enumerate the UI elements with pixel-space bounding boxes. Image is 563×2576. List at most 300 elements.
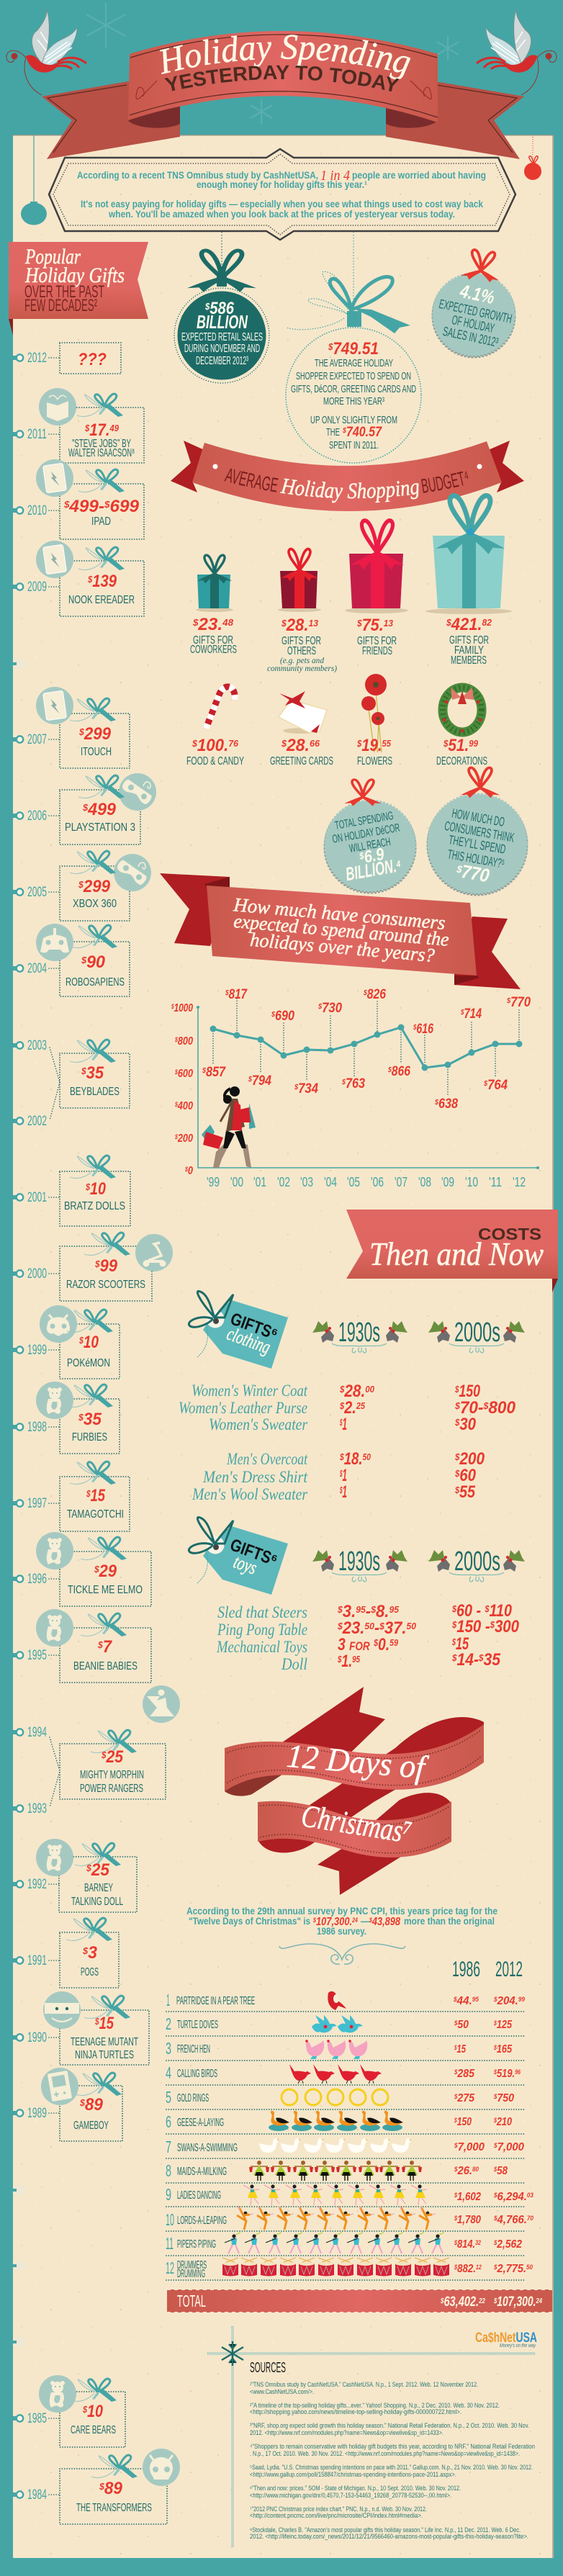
data labels: 734 <box>298 1081 318 1096</box>
data labels: $ <box>363 989 367 997</box>
budget labels row one: 28. <box>286 616 308 635</box>
timeline entry: 1985: CARE BEARS <box>71 2424 116 2436</box>
toys price table: $ <box>337 1654 342 1665</box>
ornament: 749.51 average spend: SPENT IN 2011. <box>329 439 379 451</box>
table header years: 2012 <box>495 1958 523 1981</box>
ornament: 749.51 average spend: 749.51 <box>333 339 379 359</box>
toys price table: $ <box>451 1603 457 1614</box>
heading ribbon: popular holiday gifts <box>9 242 148 335</box>
prices 1986: $ <box>453 1996 457 2003</box>
total bar: $ <box>493 2297 497 2305</box>
timeline entry: 2003 and 2002: BEYBLADES <box>70 1086 120 1098</box>
budget labels row two: $ <box>281 738 287 749</box>
prices 2012: 4,766. <box>497 2214 527 2226</box>
prices 1986: 26. <box>457 2165 472 2177</box>
title banner <box>42 31 524 159</box>
timeline entry: 1999 <box>13 1305 120 1379</box>
sources list: <http://shopping.yahoo.com/news/timeline-top-selling-holiday-gifts-000000722.html>. <box>250 2408 461 2415</box>
ornament: 749.51 average spend: GIFTS, DéCOR, GREETING CARDS AND <box>291 383 416 395</box>
ribbon: costs then and now: COSTS <box>478 1225 541 1243</box>
banner main arc <box>128 31 438 122</box>
timeline entry: 1990: 1990 <box>27 2030 47 2045</box>
toys price table: $ <box>379 1621 385 1631</box>
paragraph: twelve days survey: $ <box>369 1917 372 1924</box>
gift: others <box>278 549 321 612</box>
prices 1986: 285 <box>456 2068 475 2080</box>
timeline entry: 2007: $ <box>78 726 84 737</box>
total bar: 24 <box>536 2297 542 2305</box>
timeline entry: 2003 and 2002 <box>13 1038 130 1129</box>
timeline entry: 2010 <box>13 459 144 539</box>
budget labels row one: $ <box>281 618 287 629</box>
data labels: $ <box>248 1076 252 1084</box>
sources list: <http://www.gallup.com/poll/158847/christmas-spending-intentions-pace-2011.aspx>. <box>250 2471 456 2478</box>
timeline entry: 2000: 2000 <box>27 1266 47 1282</box>
paragraph: twelve days survey <box>186 1905 497 1937</box>
x axis labels <box>207 1175 526 1189</box>
total bar <box>167 2289 552 2312</box>
prices 2012: 2,775. <box>497 2263 526 2275</box>
timeline entry: 1990: NINJA TURTLES <box>75 2049 134 2061</box>
icon: tablet <box>36 541 73 578</box>
sources list: ²"A timeline of the top-selling holiday gifts...ever." Yahoo! Shopping. N.p., 2 Dec. 2010. Web. 30 Nov. 2012. <box>250 2402 500 2409</box>
sources list: <http://www.michigan.gov/dnr/0,4570,7-153-54463_19268_20778-52530--,00.html>. <box>250 2492 451 2499</box>
prices 1986: 882. <box>457 2263 476 2275</box>
budget labels row one: GIFTS FOR <box>357 635 397 647</box>
budget labels row one: FAMILY <box>454 644 484 657</box>
budget labels row one: 13 <box>384 618 394 629</box>
prices 2012: 7,000 <box>497 2141 524 2153</box>
text: 10 <box>166 2210 174 2229</box>
timeline entry: 1984 <box>13 2449 180 2524</box>
heading ribbon: popular holiday gifts: Popular <box>24 245 81 269</box>
icon: teddy bear <box>39 2375 76 2413</box>
prices 2012: 50 <box>526 2264 533 2271</box>
ornament: 586 billion: DURING NOVEMBER AND <box>184 343 260 355</box>
timeline entry: 1996: 1996 <box>27 1572 47 1587</box>
heading ribbon: popular holiday gifts: FEW DECADES² <box>24 296 97 315</box>
clothing price table: Men's Wool Sweater <box>192 1485 308 1503</box>
budget labels row one: 48 <box>222 617 234 628</box>
prices 2012: $ <box>493 2142 497 2149</box>
timeline entry: 2007: ITOUCH <box>81 746 112 758</box>
text: 12 <box>166 2258 174 2277</box>
toys price table: $ <box>337 1621 343 1631</box>
icon row: ladies <box>243 2184 427 2205</box>
timeline entry: 2010: $ <box>63 499 70 510</box>
intro paragraph 1: people are worried about having <box>352 169 486 181</box>
timeline entry: 2011: $ <box>84 423 90 433</box>
ribbon: how much have consumers: How much have consumers <box>232 893 446 934</box>
row numbers: 9 <box>166 2185 171 2204</box>
column headers toys: 1930s <box>338 1546 380 1577</box>
sources divider <box>207 2326 535 2547</box>
budget labels row one: OTHERS <box>287 645 316 657</box>
row labels: DRUMMING <box>177 2268 205 2280</box>
row labels: MAIDS-A-MILKING <box>177 2166 227 2178</box>
ribbon: average holiday shopping budget <box>171 441 524 511</box>
timeline entry: 1992: BARNEY <box>84 1882 113 1894</box>
clothing price table: 00 <box>365 1384 375 1395</box>
timeline entry: 2004 <box>13 924 130 996</box>
text: PARTRIDGE IN A PEAR TREE <box>176 1995 255 2007</box>
data labels: $ <box>387 1066 392 1074</box>
timeline entry: 1996: $ <box>94 1564 99 1575</box>
timeline entry: 1985: 1985 <box>27 2411 47 2426</box>
data labels: 690 <box>275 1009 294 1024</box>
timeline entry: 2007 <box>13 687 130 768</box>
y axis labels: 0 <box>188 1165 193 1177</box>
prices 1986: 32 <box>475 2239 481 2246</box>
timeline entry: 1995 <box>13 1609 151 1683</box>
timeline entry: 2010: 699 <box>109 497 140 516</box>
budget labels row two: 100. <box>197 736 228 755</box>
icon: robot skull <box>143 2449 180 2486</box>
timeline entry: 2007: 2007 <box>27 732 47 747</box>
row numbers: 3 <box>166 2039 171 2058</box>
prices 1986 <box>453 1995 485 2275</box>
clothing price table: $ <box>454 1417 460 1428</box>
budget labels row two: DECORATIONS <box>436 755 487 767</box>
icon: game controller <box>119 773 156 811</box>
budget labels row one: (e.g. pets and <box>280 655 325 665</box>
total bar: 63,402. <box>443 2294 479 2310</box>
ornament: holiday decor spending: $ <box>358 850 365 862</box>
icon row: swans <box>259 2138 412 2153</box>
y axis labels: 1000 <box>174 1002 193 1014</box>
timeline entry: 1997: 15 <box>91 1486 105 1505</box>
prices 2012: $ <box>493 2215 497 2222</box>
clothing price table: Women's Winter Coat <box>192 1382 307 1400</box>
budget labels row two: 76 <box>228 738 239 749</box>
x axis labels: '04 <box>324 1175 337 1189</box>
timeline entry: 1990: TEENAGE MUTANT <box>71 2036 138 2048</box>
timeline entry: 2003 and 2002: 2003 <box>27 1038 47 1053</box>
data labels: 763 <box>346 1076 365 1091</box>
icon: alien <box>40 1305 77 1343</box>
dotted leaders <box>213 999 519 1094</box>
toys price table: 15 <box>456 1634 469 1654</box>
icon: gameboy <box>41 2068 78 2105</box>
data labels: 794 <box>252 1073 271 1089</box>
toys price table: 95 <box>352 1654 360 1665</box>
timeline entry: 1989: $ <box>79 2097 86 2108</box>
ornament: 586 billion: EXPECTED RETAIL SALES <box>181 331 263 343</box>
logo: cashnetusa: Ca$hNetUSA <box>475 2330 537 2346</box>
timeline entry: 1997: TAMAGOTCHI <box>67 1508 124 1521</box>
prices 2012: $ <box>493 2166 497 2173</box>
gift: friends <box>345 521 408 613</box>
ornament: 4.1 percent growth: OF HOLIDAY <box>451 312 496 335</box>
toys price table: - <box>374 1618 379 1638</box>
banner: 12 days of <box>225 1724 484 1791</box>
timeline entry: 2010: IPAD <box>91 515 111 528</box>
prices 2012: 99 <box>518 1996 525 2003</box>
toys price table: 14- <box>456 1650 479 1670</box>
budget labels row two: 55 <box>382 738 392 749</box>
row divider lines <box>166 2012 525 2280</box>
ornament: 586 billion <box>174 232 269 383</box>
prices 2012: 210 <box>496 2116 512 2128</box>
snowflake decorations <box>86 3 459 124</box>
data labels: 770 <box>510 995 531 1010</box>
x axis labels: '00 <box>230 1175 243 1189</box>
timeline entry: 1998: 35 <box>84 1410 102 1429</box>
toys price table: Sled that Steers <box>217 1603 307 1621</box>
timeline entry: 1996 <box>13 1532 151 1606</box>
timeline entry: 1992: TALKING DOLL <box>71 1896 123 1908</box>
heading ribbon: popular holiday gifts: OVER THE PAST <box>24 282 104 302</box>
intro paragraph 2: when. You'll be amazed when you look back at the prices of yesteryear versus today. <box>108 208 455 220</box>
timeline entry: 2007: 299 <box>84 724 112 744</box>
intro paragraph 2: It's not easy paying for holiday gifts — especially when you see what things used to cost way back <box>81 198 483 210</box>
clothing price table: $ <box>454 1384 459 1395</box>
row labels: SWANS-A-SWIMMING <box>177 2142 238 2154</box>
sources list: ⁶"Then and now: prices." SOM - State of Michigan. N.p., 10 Sept. 2010. Web. 30 Nov. 2012. <box>250 2485 461 2492</box>
budget labels row one: 421. <box>451 615 482 634</box>
clothing price table: $ <box>339 1384 345 1395</box>
ornament: holiday decor spending: WILL REACH <box>348 836 392 855</box>
ribbon: average holiday shopping budget: AVERAGE <box>224 468 279 492</box>
timeline markers: 1988 to 1986 <box>13 2186 25 2346</box>
tag: gifts clothing <box>189 1291 288 1369</box>
timeline entry: 1994 and 1993: 1994 <box>27 1725 47 1740</box>
prices 2012: 58 <box>497 2165 508 2177</box>
icon row: turtle doves <box>312 2015 363 2032</box>
row labels: CALLING BIRDS <box>177 2068 217 2080</box>
ornament: 749.51 average spend <box>286 232 421 463</box>
ornament: 4.1 percent growth: 4.1% <box>458 280 497 308</box>
budget labels row one: 82 <box>482 617 492 628</box>
budget labels row two: 99 <box>469 738 479 749</box>
timeline entry: 2000: RAZOR SCOOTERS <box>66 1279 145 1291</box>
timeline entry: 1984: 89 <box>104 2479 123 2498</box>
y axis labels: 800 <box>178 1035 193 1048</box>
timeline entry: 2011: 49 <box>109 423 120 433</box>
x axis labels: '99 <box>207 1175 220 1189</box>
clothing price table: $ <box>340 1468 343 1479</box>
toys price table <box>216 1601 520 1673</box>
row labels: PIPERS PIPING <box>177 2238 216 2251</box>
bird right <box>477 9 557 95</box>
row labels: GEESE-A-LAYING <box>177 2117 224 2129</box>
tag: gifts toys <box>189 1517 288 1595</box>
timeline entry: 2005: 299 <box>83 877 111 896</box>
timeline entry: 1991: 1991 <box>27 1953 47 1968</box>
timeline entry: 1995: BEANIE BABIES <box>73 1660 138 1672</box>
timeline entry: 1999: 1999 <box>27 1343 47 1358</box>
ornament: 749.51 average spend: MORE THIS YEAR³ <box>323 395 384 407</box>
ribbon: average holiday shopping budget: Holiday Shopping <box>280 478 419 503</box>
ornament: 749.51 average spend: SHOPPER EXPECTED TO SPEND ON <box>296 370 411 382</box>
total bar: $ <box>440 2297 444 2305</box>
timeline entry: 2009: 139 <box>92 572 117 591</box>
data labels: 857 <box>206 1065 226 1080</box>
prices 2012: 519. <box>497 2068 515 2080</box>
prices 1986: 44. <box>456 1995 472 2007</box>
clothing price table: Women's Sweater <box>209 1415 308 1433</box>
toys price table: 3 FOR <box>338 1635 375 1654</box>
banner folds <box>128 101 180 128</box>
icon: teddy bear <box>36 1609 73 1647</box>
timeline entry: 2001: 2001 <box>27 1190 47 1205</box>
total bar: TOTAL <box>177 2292 206 2310</box>
timeline entry: 1984: 1984 <box>27 2487 47 2503</box>
timeline entry: 2004: 2004 <box>27 961 47 976</box>
paragraph: twelve days survey: more than the original <box>404 1915 495 1927</box>
toys price table: 95 <box>389 1604 400 1615</box>
timeline entry: 1990: $ <box>94 2016 99 2027</box>
timeline entry: 1994 and 1993: $ <box>101 1749 107 1760</box>
hanging ornament: red <box>524 137 541 180</box>
clothing price table: $ <box>340 1485 343 1495</box>
icon: scooter <box>135 1234 173 1271</box>
timeline entry: 1989: GAMEBOY <box>73 2120 109 2132</box>
timeline entry: 1995: 7 <box>103 1637 113 1657</box>
column headers clothing: 2000s <box>454 1318 500 1348</box>
timeline entry: 1994 and 1993: POWER RANGERS <box>80 1783 143 1795</box>
prices 1986: $ <box>454 2192 457 2199</box>
timeline entry: 2006: PLAYSTATION 3 <box>65 821 135 834</box>
clothing price table: $ <box>454 1468 460 1479</box>
row numbers <box>166 1991 174 2277</box>
toys price table: Mechanical Toys <box>216 1638 307 1656</box>
clothing price table: 28. <box>343 1382 365 1401</box>
prices 1986: $ <box>454 2117 457 2124</box>
timeline entry: 1994 and 1993: 1993 <box>27 1801 47 1816</box>
row labels <box>176 1995 255 2280</box>
sources list: ¹"TNS Omnibus study by CashNetUSA." CashNetUSA. N.p., 1 Sept. 2012. Web. 12 November 2012. <box>250 2381 478 2388</box>
prices 1986: $ <box>454 2215 457 2222</box>
row labels: LADIES DANCING <box>177 2189 221 2202</box>
tag: gifts toys: toys <box>231 1551 260 1579</box>
gift: family members <box>425 495 512 614</box>
y axis labels: 600 <box>178 1068 193 1080</box>
row numbers: 4 <box>166 2063 171 2082</box>
timeline entry: 1989: 89 <box>85 2095 104 2115</box>
icon: poppies <box>361 674 387 752</box>
sources list: <www.CashNetUSA.com/>. <box>250 2388 314 2395</box>
budget labels row one: COWORKERS <box>190 644 237 656</box>
row labels: DRUMMERS <box>177 2259 207 2271</box>
prices 2012: $ <box>493 2019 497 2027</box>
data labels: $ <box>317 1003 322 1011</box>
ornament: consumers think: HOW MUCH DO <box>451 806 506 829</box>
ornament: 4.1 percent growth <box>433 248 518 357</box>
prices 1986: $ <box>454 2019 457 2027</box>
toys price table: 50 <box>407 1621 417 1631</box>
budget labels row one: 13 <box>308 618 319 629</box>
clothing price table: $ <box>483 1400 489 1411</box>
ribbon: costs then and now <box>346 1210 558 1292</box>
budget labels row two: $ <box>192 738 197 749</box>
budget labels row one: GIFTS FOR <box>193 634 233 647</box>
timeline entry: 2011 <box>13 388 144 463</box>
x axis labels: '02 <box>277 1175 290 1189</box>
prices 1986: 95 <box>472 1996 479 2003</box>
budget labels row two: FOOD & CANDY <box>186 755 244 767</box>
timeline entry: 1991: $ <box>82 1945 89 1956</box>
data labels: $ <box>413 1024 416 1032</box>
prices 2012: 204. <box>497 1995 518 2007</box>
icon: snowflake <box>222 2341 243 2366</box>
y axis labels <box>171 1002 193 1177</box>
prices 2012: $ <box>493 2044 497 2051</box>
ornament: holiday decor spending: ON HOLIDAY DéCOR <box>331 822 401 846</box>
line chart: expected holiday spending <box>171 987 539 1189</box>
intro paragraph 2 <box>81 198 483 220</box>
timeline entry: 2012 <box>13 343 121 374</box>
intro paragraph 1: According to a recent TNS Omnibus study by CashNetUSA, <box>77 169 318 181</box>
row labels: LORDS-A-LEAPING <box>177 2215 227 2227</box>
prices 1986: $ <box>454 2093 457 2100</box>
prices 2012: $ <box>493 2239 497 2246</box>
data labels: $ <box>341 1078 346 1086</box>
ribbon: how much have consumers: expected to spend around the <box>233 910 450 950</box>
icon row: lords <box>237 2206 436 2230</box>
timeline entry: 2012: ??? <box>78 350 107 369</box>
timeline entry: 2010: 499- <box>68 497 104 516</box>
tag: gifts clothing: GIFTS⁶ <box>228 1309 280 1344</box>
paragraph: twelve days survey: $ <box>312 1917 316 1924</box>
ornament: 586 billion: BILLION <box>197 311 248 333</box>
toys price table: $ <box>478 1652 484 1663</box>
clothing price table: 60 <box>459 1466 477 1485</box>
budget labels row one: FRIENDS <box>362 645 392 657</box>
timeline entry: 1996: 29 <box>99 1562 117 1581</box>
title text: Holiday Spending <box>160 35 410 79</box>
toys price table: 8. <box>376 1602 389 1621</box>
icon row: drummers <box>222 2258 449 2276</box>
data labels: 730 <box>322 1001 342 1016</box>
clothing price table: 2. <box>343 1398 356 1418</box>
prices 2012: 96 <box>515 2068 521 2076</box>
timeline entry: 1985: $ <box>82 2404 88 2415</box>
prices 1986: 12 <box>476 2264 482 2271</box>
data line <box>213 1027 519 1068</box>
decorative flourish <box>279 1944 405 1964</box>
prices 1986: 1,780 <box>457 2214 481 2226</box>
x axis labels: '07 <box>395 1175 407 1189</box>
budget labels row two: 19. <box>361 736 382 755</box>
timeline entry: 1999: POKéMON <box>67 1357 110 1369</box>
budget labels row two: FLOWERS <box>357 755 392 767</box>
timeline entry: 1984: $ <box>99 2481 105 2492</box>
gift: coworkers <box>196 555 233 612</box>
illustration: woman with shopping bags <box>202 1086 256 1168</box>
timeline entry: 2005: XBOX 360 <box>73 898 117 910</box>
icon row: geese <box>269 2111 403 2131</box>
timeline entry: 1990: 15 <box>99 2014 114 2033</box>
icon: wreath <box>442 688 482 733</box>
row labels: GOLD RINGS <box>177 2092 209 2104</box>
budget labels row one: 75. <box>362 616 384 635</box>
toys price table: - <box>366 1602 371 1621</box>
timeline entry: 2006: $ <box>82 802 89 813</box>
clothing price table: $ <box>454 1451 460 1462</box>
row numbers: 1 <box>166 1991 170 2009</box>
timeline entry: 2005: 2005 <box>27 885 47 900</box>
x axis labels: '01 <box>253 1175 266 1189</box>
budget labels row two: 28. <box>286 736 310 755</box>
prices 2012: 70 <box>527 2215 533 2222</box>
toys price table: 95 <box>356 1604 366 1615</box>
x axis labels: '03 <box>300 1175 313 1189</box>
data labels: 826 <box>367 987 386 1002</box>
intro paragraph 1: enough money for holiday gifts this year.¹ <box>197 179 367 190</box>
ornament: holiday decor spending: TOTAL SPENDING <box>334 810 395 832</box>
toys price table: 60 - <box>456 1601 485 1621</box>
